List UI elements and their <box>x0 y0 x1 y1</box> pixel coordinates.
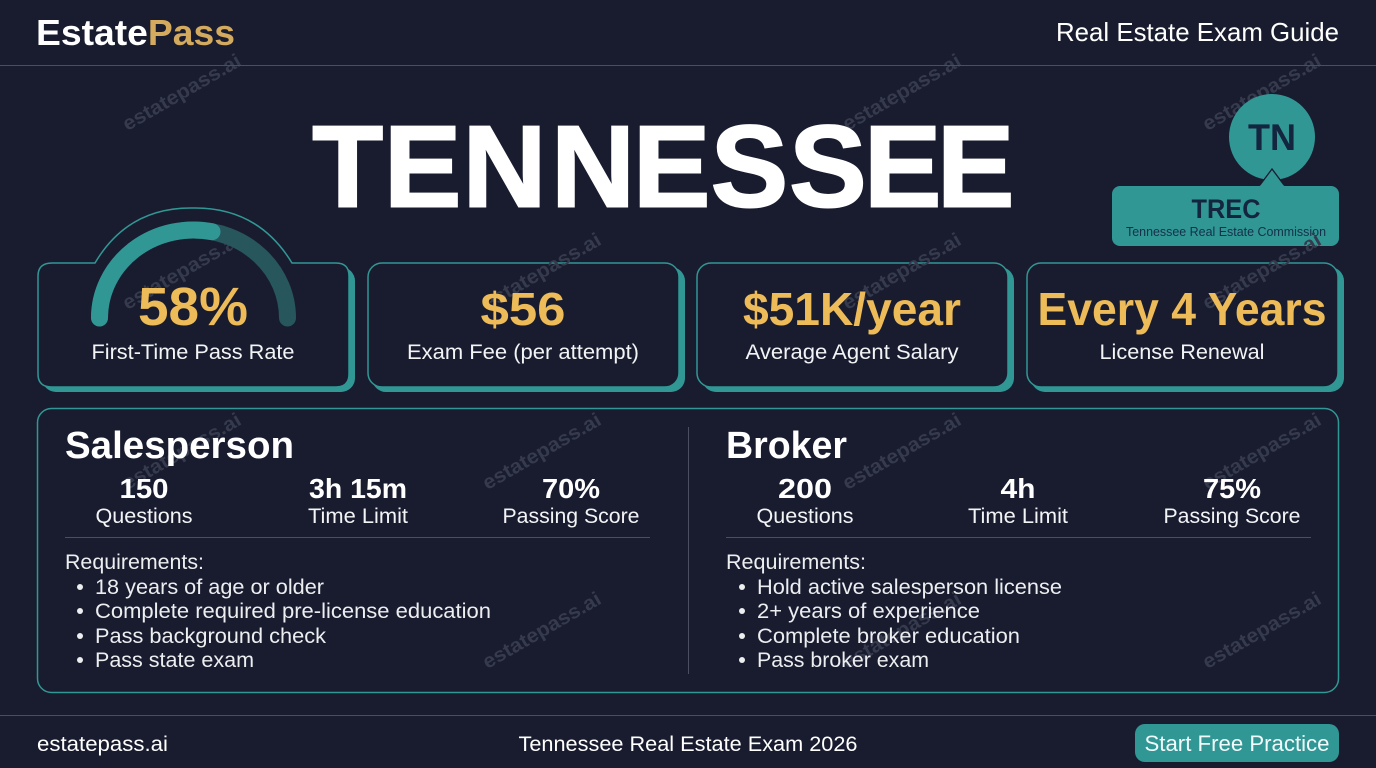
stat card: renewal <box>1027 229 1344 392</box>
stat card: salary: $51K/year <box>743 283 961 335</box>
salesperson column <box>65 425 650 672</box>
requirements list: Complete broker education <box>757 624 1020 648</box>
requirements list: Pass state exam <box>95 648 254 672</box>
stat: time limit: Time Limit <box>308 505 408 528</box>
watermarks <box>119 50 1325 674</box>
stat card: pass rate: First-Time Pass Rate <box>92 341 294 364</box>
header label: Real Estate Exam Guide <box>1056 17 1339 47</box>
broker column: Broker <box>726 425 847 467</box>
stat card: pass rate: 58% <box>138 277 248 337</box>
stat: passing score: Passing Score <box>1164 505 1300 528</box>
gauge <box>100 230 288 318</box>
panel: license details <box>38 408 1338 692</box>
stat: time limit: 4h <box>1000 473 1036 504</box>
stat card: salary: Average Agent Salary <box>746 341 959 364</box>
footer <box>0 716 1376 762</box>
stat card: exam fee <box>368 229 685 392</box>
stat: passing score <box>502 473 640 528</box>
button: start free practice <box>1135 724 1339 762</box>
footer title: Tennessee Real Estate Exam 2026 <box>518 732 858 756</box>
stat card: exam fee: estatepass.ai <box>479 229 605 315</box>
requirements list: 18 years of age or older <box>95 575 324 599</box>
broker column <box>726 425 1311 672</box>
stat card: exam fee: $56 <box>480 283 566 335</box>
requirements list: Requirements: <box>65 550 204 574</box>
requirements list: Pass background check <box>95 624 326 648</box>
header <box>0 12 1376 66</box>
watermarks: estatepass.ai <box>1199 409 1325 495</box>
watermarks: estatepass.ai <box>479 588 605 674</box>
stat card: pass rate <box>38 208 355 392</box>
footer site: estatepass.ai <box>37 732 168 756</box>
watermarks: estatepass.ai <box>119 409 245 495</box>
requirements list <box>65 550 491 672</box>
stat card: renewal: License Renewal <box>1100 341 1264 364</box>
TREC badge <box>1112 94 1339 246</box>
stat card: pass rate: estatepass.ai <box>119 229 245 315</box>
requirements list: 2+ years of experience <box>757 599 980 623</box>
TREC box: Tennessee Real Estate Commission <box>1126 225 1326 239</box>
icon: TN circle <box>1229 94 1315 180</box>
watermarks: estatepass.ai <box>839 50 965 136</box>
stat: time limit: Time Limit <box>968 505 1068 528</box>
watermarks: estatepass.ai <box>119 50 245 136</box>
stat: passing score: 70% <box>542 473 600 504</box>
watermarks: estatepass.ai <box>839 588 965 674</box>
requirements list <box>726 550 1062 672</box>
stat: questions: Questions <box>756 505 854 528</box>
logo: EstatePass: EstatePass <box>36 12 235 53</box>
watermarks: estatepass.ai <box>1199 588 1325 674</box>
stat: time limit <box>308 473 408 528</box>
stat: passing score: 75% <box>1203 473 1261 504</box>
stat card: exam fee: Exam Fee (per attempt) <box>407 341 639 364</box>
stat: passing score: Passing Score <box>502 505 640 528</box>
title: TENNESSEE <box>312 102 1014 232</box>
stat: questions <box>96 473 192 528</box>
watermarks: estatepass.ai <box>479 409 605 495</box>
stat: questions: 200 <box>778 473 832 504</box>
stat: time limit: 3h 15m <box>309 473 407 504</box>
stat: questions: 150 <box>120 473 168 504</box>
stat: questions <box>756 473 854 528</box>
TREC box: TREC <box>1192 194 1260 224</box>
TREC box <box>1112 171 1339 246</box>
requirements list: Pass broker exam <box>757 648 929 672</box>
salesperson column: Salesperson <box>65 425 294 467</box>
stat card: salary <box>697 229 1014 392</box>
stat card: salary: estatepass.ai <box>839 229 965 315</box>
watermarks: estatepass.ai <box>839 409 965 495</box>
stat: questions: Questions <box>96 505 192 528</box>
requirements list: Requirements: <box>726 550 866 574</box>
watermarks: estatepass.ai <box>1199 50 1325 136</box>
requirements list: Complete required pre-license education <box>95 599 491 623</box>
stat card: renewal: Every 4 Years <box>1038 283 1326 335</box>
icon: TN circle: TN <box>1248 117 1296 158</box>
stat: passing score <box>1164 473 1300 528</box>
stat card: renewal: estatepass.ai <box>1199 229 1325 315</box>
button: start free practice: Start Free Practice <box>1144 731 1330 756</box>
stat: time limit <box>968 473 1068 528</box>
requirements list: Hold active salesperson license <box>757 575 1062 599</box>
